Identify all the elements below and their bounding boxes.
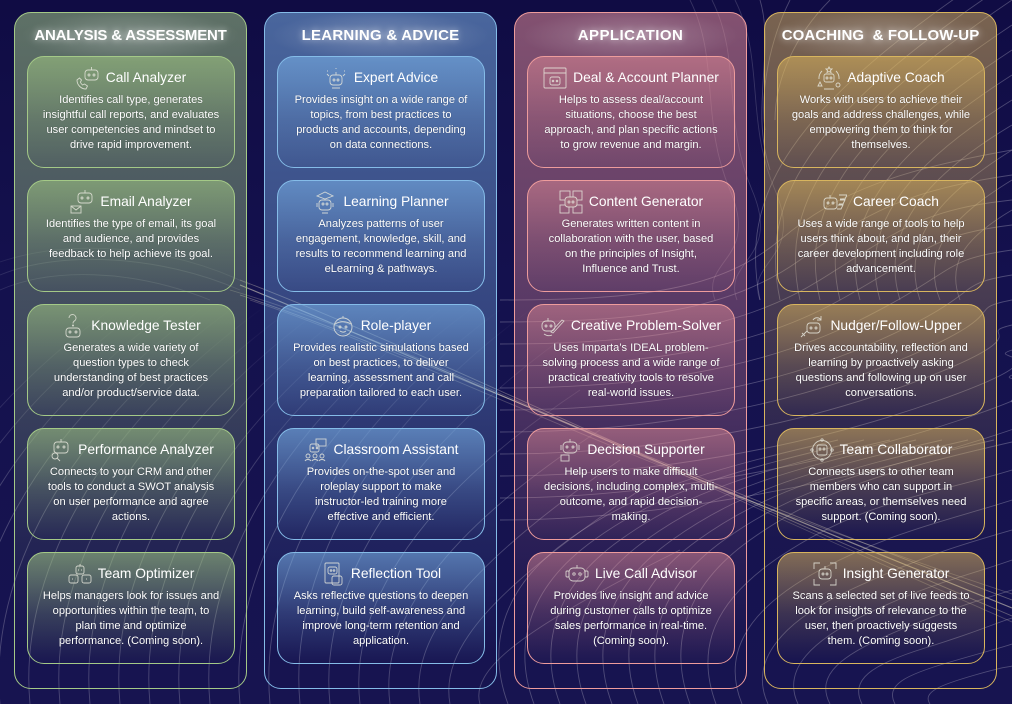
card: deal and account planner — [527, 56, 735, 168]
panel: analysis and assessment — [14, 12, 247, 689]
card: performance analyzer: Connects to your CRM and other — [50, 466, 212, 478]
heading: analysis and assessment: ANALYSIS & ASSESSMENT — [34, 27, 227, 44]
card: expert advice — [277, 56, 485, 168]
card: email analyzer — [27, 180, 235, 292]
card: call analyzer: insightful call reports, and evaluates — [43, 109, 219, 121]
card: nudger/follow-upper — [777, 304, 985, 416]
card: nudger/follow-upper: Drives accountability, reflection and — [794, 342, 968, 354]
card: team collaborator: support. (Coming soon). — [821, 511, 940, 523]
card: team optimizer: Team Optimizer — [98, 566, 194, 580]
card: call analyzer: user competencies and mindset to — [47, 124, 215, 136]
card: performance analyzer: on user performance and agree — [53, 496, 209, 508]
card: role-player: Provides realistic simulations based — [293, 342, 469, 354]
card: decision supporter: outcome, and rapid decision- — [560, 496, 702, 508]
card: role-player: on best practices, to deliver — [313, 357, 449, 369]
card: adaptive coach: themselves. — [851, 139, 911, 151]
card: insight generator: Insight Generator — [843, 566, 949, 580]
card: nudger/follow-upper: learning by proactively asking — [808, 357, 954, 369]
card: nudger/follow-upper: conversations. — [845, 387, 917, 399]
card: team optimizer — [27, 552, 235, 664]
card: adaptive coach: Works with users to achieve their — [800, 94, 962, 106]
card: adaptive coach — [777, 56, 985, 168]
card: team collaborator: Connects users to other team — [808, 466, 954, 478]
card: live call advisor: Provides live insight and advice — [554, 590, 708, 602]
card: classroom assistant: Classroom Assistant — [334, 442, 458, 456]
card: nudger/follow-upper: Nudger/Follow-Upper — [830, 318, 962, 332]
card: email analyzer: Identifies the type of email, its goal — [46, 218, 216, 230]
card: adaptive coach: empowering them to think for — [809, 124, 953, 136]
card: insight generator: user, then proactively suggests — [805, 620, 957, 632]
card: content generator: Influence and Trust. — [582, 263, 680, 275]
card: team optimizer: plan time and optimize — [76, 620, 186, 632]
card: role-player: preparation tailored to each user. — [300, 387, 462, 399]
card: live call advisor: sales performance in real-time. — [555, 620, 707, 632]
card: classroom assistant: Provides on-the-spot user and — [307, 466, 455, 478]
card: knowledge tester: Generates a wide variety of — [63, 342, 199, 354]
card: learning planner: results to recommend learning and — [296, 248, 466, 260]
heading: application: APPLICATION — [578, 27, 683, 44]
card: insight generator — [777, 552, 985, 664]
card: career coach — [777, 180, 985, 292]
card: email analyzer: Email Analyzer — [100, 194, 192, 208]
card: creative problem-solver — [527, 304, 735, 416]
card: knowledge tester: understanding of best practices — [54, 372, 208, 384]
card: content generator: collaboration with the user, based — [549, 233, 713, 245]
card: decision supporter: making. — [612, 511, 650, 523]
card: deal and account planner: Helps to assess deal/account — [559, 94, 703, 106]
card: career coach: users think about, and plan, their — [801, 233, 961, 245]
card: adaptive coach: goals and address challenges, while — [792, 109, 970, 121]
card: team optimizer: opportunities within the team, to — [53, 605, 209, 617]
card: performance analyzer: actions. — [112, 511, 150, 523]
card: deal and account planner: situations, choose the best — [565, 109, 697, 121]
panel: application — [514, 12, 747, 689]
card: knowledge tester: Knowledge Tester — [91, 318, 201, 332]
card: content generator: Content Generator — [589, 194, 703, 208]
card: email analyzer: feedback to help achieve its goal. — [49, 248, 213, 260]
card: insight generator: Scans a selected set of live feeds to — [792, 590, 970, 602]
card: live call advisor: (Coming soon). — [593, 635, 669, 647]
card: call analyzer: drive rapid improvement. — [70, 139, 192, 151]
card: creative problem-solver: practical creativity tools to resolve — [548, 372, 714, 384]
card: career coach: Uses a wide range of tools to help — [797, 218, 965, 230]
card: reflection tool: Reflection Tool — [351, 566, 441, 580]
card: creative problem-solver: Uses Imparta’s IDEAL problem- — [553, 342, 709, 354]
card: deal and account planner: approach, and plan specific actions — [544, 124, 718, 136]
panel: learning and advice — [264, 12, 497, 689]
card: expert advice: Expert Advice — [354, 70, 438, 84]
card: career coach: Career Coach — [853, 194, 939, 208]
card: performance analyzer: Performance Analyzer — [78, 442, 214, 456]
card: knowledge tester — [27, 304, 235, 416]
card: adaptive coach: Adaptive Coach — [847, 70, 945, 84]
card: call analyzer — [27, 56, 235, 168]
card: career coach: advancement. — [846, 263, 916, 275]
card: role-player: learning, assessment and call — [308, 372, 454, 384]
card: nudger/follow-upper: questions and following up on user — [796, 372, 966, 384]
card: content generator — [527, 180, 735, 292]
heading: coaching and follow-up: COACHING & FOLLOW-UP — [782, 27, 979, 44]
card: team collaborator: Team Collaborator — [840, 442, 952, 456]
card: live call advisor: during customer calls to optimize — [550, 605, 712, 617]
card: classroom assistant: effective and efficient. — [328, 511, 434, 523]
card: reflection tool: learning, build self-awareness and — [297, 605, 465, 617]
card: expert advice: Provides insight on a wide range of — [295, 94, 467, 106]
card: learning planner: eLearning & pathways. — [325, 263, 437, 275]
card: insight generator: look for insights of relevance to the — [795, 605, 967, 617]
card: creative problem-solver: real-world issues. — [588, 387, 674, 399]
card: learning planner — [277, 180, 485, 292]
card: classroom assistant: instructor-led training more — [315, 496, 447, 508]
card: team optimizer: performance. (Coming soon). — [59, 635, 203, 647]
card: knowledge tester: and/or product/service data. — [62, 387, 200, 399]
bright streak — [230, 280, 1012, 622]
card: content generator: Generates written content in — [562, 218, 700, 230]
card: knowledge tester: question types to check — [73, 357, 189, 369]
card: live call advisor: Live Call Advisor — [595, 566, 697, 580]
card: expert advice: on data connections. — [330, 139, 432, 151]
card: reflection tool: application. — [353, 635, 409, 647]
card: email analyzer: and audience, and provides — [63, 233, 199, 245]
heading: learning and advice: LEARNING & ADVICE — [302, 27, 459, 44]
card: team collaborator: members who can support in — [810, 481, 952, 493]
card: insight generator: them. (Coming soon). — [828, 635, 934, 647]
card: deal and account planner: Deal & Account Planner — [573, 70, 719, 84]
card: team collaborator: specific areas, or themselves need — [796, 496, 966, 508]
card: reflection tool — [277, 552, 485, 664]
card: learning planner: Analyzes patterns of user — [318, 218, 444, 230]
card: deal and account planner: to grow revenue and margin. — [560, 139, 702, 151]
card: classroom assistant: roleplay support to make — [320, 481, 442, 493]
card: career coach: career development including role — [798, 248, 964, 260]
card: expert advice: topics, from best practices to — [310, 109, 452, 121]
card: live call advisor — [527, 552, 735, 664]
card: decision supporter: Decision Supporter — [587, 442, 705, 456]
card: reflection tool: improve long-term retention and — [302, 620, 460, 632]
card: performance analyzer — [27, 428, 235, 540]
card: call analyzer: Identifies call type, generates — [59, 94, 203, 106]
card: performance analyzer: tools to conduct a SWOT analysis — [48, 481, 214, 493]
card: decision supporter: decisions, including complex, multi- — [544, 481, 718, 493]
card: call analyzer: Call Analyzer — [106, 70, 186, 84]
card: content generator: on the principles of Insight, — [565, 248, 697, 260]
card: expert advice: products and accounts, depending — [296, 124, 466, 136]
card: classroom assistant — [277, 428, 485, 540]
card: team optimizer: Helps managers look for issues and — [43, 590, 219, 602]
card: learning planner: engagement, knowledge, skill, and — [296, 233, 466, 245]
card: creative problem-solver: Creative Problem-Solver — [571, 318, 721, 332]
card: decision supporter — [527, 428, 735, 540]
card: decision supporter: Help users to make difficult — [564, 466, 697, 478]
card: role-player: Role-player — [361, 318, 431, 332]
card: team collaborator — [777, 428, 985, 540]
card: creative problem-solver: solving process and a wide range of — [542, 357, 720, 369]
card: role-player — [277, 304, 485, 416]
card: learning planner: Learning Planner — [343, 194, 449, 208]
card: reflection tool: Asks reflective questions to deepen — [294, 590, 468, 602]
panel: coaching and follow-up — [764, 12, 997, 689]
